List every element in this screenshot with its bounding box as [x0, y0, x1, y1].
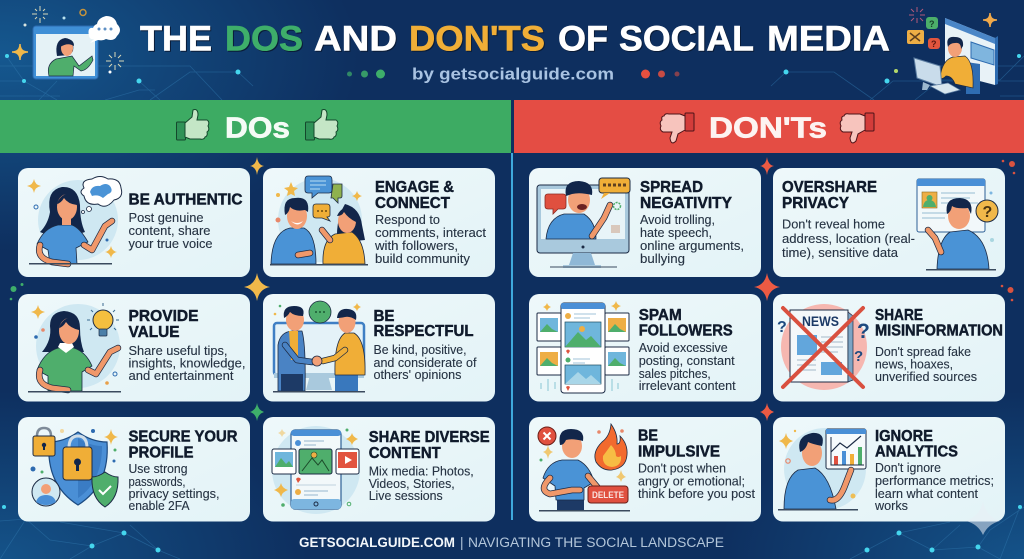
text: Share Misinformation: unverified sources [875, 369, 977, 384]
icon: angry man on monitor [537, 178, 630, 268]
title: DOS [225, 20, 303, 58]
text: Secure Your Profile [128, 428, 238, 513]
title [140, 20, 890, 58]
icon: crossed-out newspaper: NEWS [802, 313, 839, 329]
text: Spread Negativity: online arguments, [640, 238, 744, 253]
title: AND [314, 20, 397, 58]
text: Engage & Connect [374, 179, 486, 266]
text: Be Authentic: content, share [128, 223, 210, 238]
title: DON'TS [409, 20, 545, 58]
text: Be Authentic: Post genuine [128, 210, 204, 225]
DON'Ts heading: DON'Ts [709, 112, 827, 144]
green subtitle dots [347, 70, 385, 78]
icon: angry man by flame and delete button [538, 424, 630, 512]
panel: Be Respectful [263, 294, 495, 402]
panel: Overshare Privacy [773, 168, 1005, 277]
panel: Spam Followers [529, 294, 761, 402]
footer: | [460, 535, 464, 550]
text: Spam Followers: SPAM [639, 307, 682, 324]
footer: GETSOCIALGUIDE.COM [299, 535, 455, 550]
icon: corner sparkle [966, 502, 1000, 535]
text: Ignore Analytics: IGNORE [875, 428, 933, 445]
panel: Be Authentic [18, 168, 250, 277]
title: MEDIA [767, 20, 890, 58]
text: Be Respectful: others' opinions [374, 367, 462, 382]
icon: person with exposed profile [917, 179, 998, 270]
text: Share Diverse Content: CONTENT [369, 445, 441, 462]
text: Secure Your Profile: Use strong [128, 461, 188, 476]
text: Be Respectful [374, 308, 477, 382]
text: Be Respectful: RESPECTFUL [374, 323, 474, 340]
text: Provide Value [128, 308, 246, 383]
text: Spread Negativity: NEGATIVITY [640, 195, 733, 212]
text: Spam Followers: Avoid excessive [639, 340, 728, 355]
icon: crossed-out newspaper: ? [777, 319, 787, 336]
text: Provide Value: Share useful tips, [128, 343, 228, 358]
text: Ignore Analytics: ANALYTICS [875, 444, 958, 460]
text: Share Diverse Content: Mix media: Photos, [369, 464, 474, 478]
text: Provide Value: and entertainment [128, 368, 234, 383]
panel: Be Impulsive [529, 417, 761, 522]
text: Spread Negativity: SPREAD [640, 179, 703, 196]
text: Ignore Analytics [874, 428, 994, 513]
text: Spread Negativity: bullying [640, 251, 685, 266]
column divider [511, 153, 513, 520]
text: Be Authentic: your true voice [128, 236, 212, 251]
panel: Share Misinformation [773, 294, 1005, 402]
text: Engage & Connect: Respond to [375, 212, 440, 227]
text: Share Diverse Content [369, 429, 490, 503]
icon: angry man by flame and delete button: DELETE [592, 490, 624, 501]
panel: DON'Ts banner [514, 100, 1024, 153]
icon: shield with padlocks [30, 428, 118, 507]
text: Engage & Connect: ENGAGE & [375, 179, 454, 196]
text: Share Diverse Content: Live sessions [369, 488, 443, 503]
icon: woman with lightbulb [28, 303, 121, 392]
text: Spread Negativity: Avoid trolling, [640, 212, 715, 227]
subtitle: by getsocialguide.com [412, 64, 614, 84]
panel: Spread Negativity [529, 168, 761, 277]
panel: Ignore Analytics [773, 417, 1005, 522]
text: Share Diverse Content: Videos, Stories, [369, 476, 455, 491]
red subtitle dots [641, 70, 680, 78]
icon: person with exposed profile: ? [982, 204, 992, 221]
icon: two people talking [270, 176, 368, 266]
icon: handshake in front of monitor [273, 301, 365, 392]
text: Provide Value: PROVIDE [128, 308, 198, 325]
text: Spread Negativity: hate speech, [640, 225, 712, 240]
icon: thumbs down left [660, 113, 694, 143]
text: Overshare Privacy: time), sensitive data [782, 245, 899, 260]
icon: crossed-out newspaper: ? [857, 320, 870, 343]
icon: thumbs up left [176, 110, 209, 140]
text: Share Misinformation: Don't spread fake [875, 344, 971, 359]
text: Be Respectful: BE [374, 308, 394, 325]
footer: NAVIGATING THE SOCIAL LANDSCAPE [468, 535, 724, 550]
text: Overshare Privacy [782, 179, 915, 260]
text: Share Misinformation: MISINFORMATION [875, 322, 1003, 340]
text: Secure Your Profile: passwords, [128, 474, 186, 489]
text: Ignore Analytics: performance metrics; [875, 473, 994, 488]
text: Share Misinformation: SHARE [875, 307, 923, 324]
text: Be Impulsive: BE [638, 428, 658, 444]
text: Ignore Analytics: Don't ignore [875, 460, 941, 475]
text: Be Impulsive [638, 428, 755, 501]
icon: header presenter window [12, 6, 124, 79]
text: Spam Followers: sales pitches, [639, 366, 711, 381]
text: Engage & Connect: build community [375, 251, 470, 266]
title: THE [140, 20, 212, 58]
text: Spam Followers [639, 307, 736, 393]
text: Spam Followers: FOLLOWERS [639, 322, 733, 340]
text: Be Impulsive: think before you post [638, 486, 755, 501]
panel: Secure Your Profile [18, 417, 250, 522]
icon: thumbs up right [306, 110, 338, 140]
text: Ignore Analytics: works [874, 498, 908, 513]
text: Secure Your Profile: PROFILE [128, 444, 194, 462]
panel: Provide Value [18, 294, 250, 402]
text: Be Impulsive: IMPULSIVE [638, 444, 720, 460]
icon: header person at computer [894, 7, 998, 94]
text: Share Misinformation: news, hoaxes, [875, 356, 953, 372]
icon: crossed-out newspaper: ? [854, 348, 863, 365]
title: SOCIAL [619, 20, 754, 58]
text: Provide Value: VALUE [128, 324, 180, 341]
text: Provide Value: insights, knowledge, [128, 356, 246, 370]
DOs heading: DOs [225, 112, 290, 144]
text: Overshare Privacy: address, location (real- [782, 231, 915, 246]
text: Overshare Privacy: Don't reveal home [782, 216, 885, 232]
text: Secure Your Profile: privacy settings, [128, 486, 220, 501]
text: Ignore Analytics: learn what content [875, 486, 978, 501]
text: Engage & Connect: CONNECT [375, 195, 451, 212]
text: Share Misinformation [875, 307, 1003, 384]
icon: header person at computer: ? [931, 39, 936, 49]
text: Overshare Privacy: PRIVACY [782, 195, 850, 212]
text: Engage & Connect: with followers, [374, 238, 458, 253]
icon: thumbs down right [840, 113, 874, 143]
text: Be Authentic: BE AUTHENTIC [128, 192, 242, 208]
icon: woman with thought bubble [27, 176, 122, 264]
text: Share Diverse Content: SHARE DIVERSE [369, 429, 490, 446]
panel: Share Diverse Content [263, 417, 495, 522]
text: Overshare Privacy: OVERSHARE [782, 179, 877, 196]
icon: phone and repeated posts [537, 301, 629, 393]
text: Be Impulsive: angry or emotional; [638, 474, 745, 488]
text: Secure Your Profile: SECURE YOUR [128, 428, 238, 446]
sparkles between cards [10, 157, 1015, 421]
text: Be Respectful: Be kind, positive, [374, 342, 466, 357]
icon: header person at computer: ? [929, 19, 934, 29]
text: Engage & Connect: comments, interact [375, 225, 486, 240]
text: Secure Your Profile: enable 2FA [128, 498, 190, 513]
text: Spam Followers: posting, constant [639, 353, 735, 368]
text: Spam Followers: irrelevant content [639, 378, 736, 393]
text: Be Impulsive: Don't post when [638, 460, 726, 476]
icon: person pointing at analytics chart [778, 428, 866, 510]
title: OF [558, 20, 608, 58]
panel: DOs banner [0, 100, 511, 153]
icon: phone with media [272, 426, 360, 514]
text: Spread Negativity [640, 179, 744, 266]
text: Be Respectful: and considerate of [374, 355, 477, 370]
icon: crossed-out newspaper [777, 304, 870, 390]
footer [299, 535, 724, 550]
text: Be Authentic [128, 192, 242, 251]
panel: Engage & Connect [263, 168, 495, 277]
